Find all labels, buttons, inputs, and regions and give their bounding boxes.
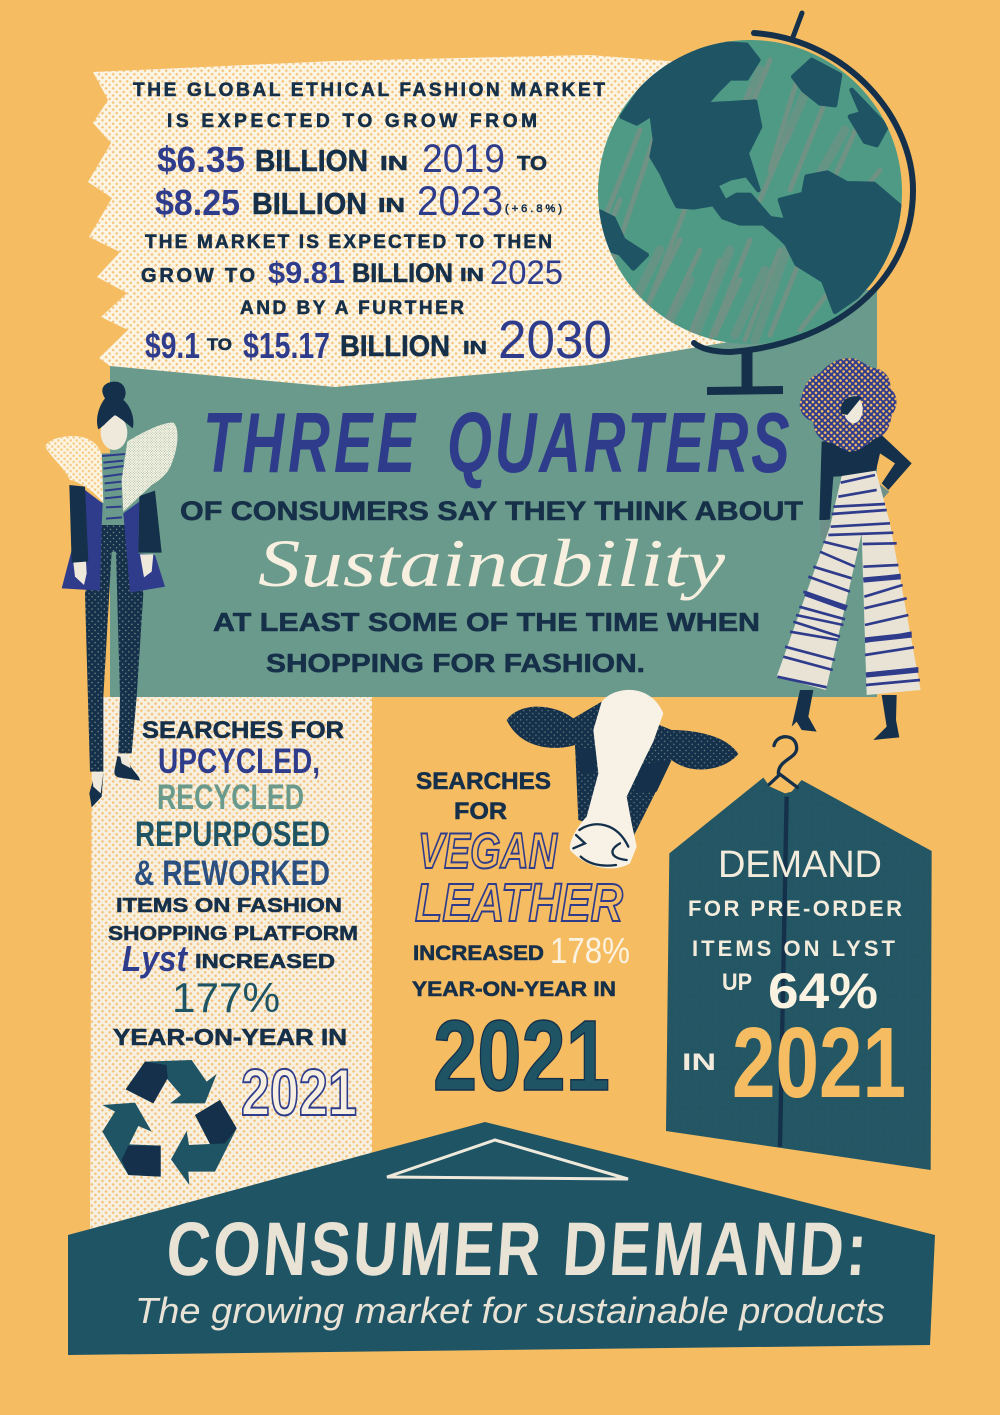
text block: upcycled searches: INCREASED [195,951,335,973]
text block: market statistics: AND BY A FURTHER [240,298,464,319]
text block: pre-order demand: 2021 [732,1007,906,1119]
text block: market statistics: IN [463,338,487,358]
text block: consumers statement: AT LEAST SOME OF THE TIME WHEN [213,607,760,637]
text block: upcycled searches: & REWORKED [134,854,330,893]
text block: market statistics: BILLION [352,258,453,288]
text block: consumers statement [180,496,804,678]
text block: upcycled searches: Lyst [122,938,189,979]
icon: recycling symbol [102,1060,237,1185]
text block: market statistics: $15.17 [243,325,330,366]
text block: market statistics: TO [517,153,547,175]
text block: upcycled searches: REPURPOSED [135,815,330,854]
text block: upcycled searches [108,717,358,1129]
icon: globe stand [694,13,913,391]
text block: market statistics: BILLION [252,186,367,221]
text block: market statistics: IN [380,153,408,175]
panel: torn paper market statistics [88,55,760,387]
text block: pre-order demand: DEMAND [718,844,882,886]
text block: market statistics: IN [378,195,405,217]
text block: market statistics: $9.81 [268,255,345,290]
panel: green sustainability [110,290,877,697]
text block: market statistics: BILLION [340,330,450,363]
text block: market statistics: 2023 [417,177,503,224]
text block: pre-order demand: UP [722,969,752,996]
text block: pre-order demand [682,844,906,1119]
text block: upcycled searches: SEARCHES FOR [142,717,344,744]
icon: globe [598,40,902,344]
icon: garment tag with hanger [666,737,932,1170]
text block: market statistics: BILLION [255,143,368,178]
text block: pre-order demand: 64% [768,963,878,1019]
text block: market statistics: 2025 [490,254,563,292]
text block: vegan leather searches: FOR [454,798,507,825]
text block: vegan leather searches: 2021 [433,1000,610,1112]
text block: upcycled searches: YEAR-ON-YEAR IN [113,1024,347,1050]
text block: vegan leather searches: INCREASED [413,942,544,965]
illustration: cow head [507,690,738,868]
text block: market statistics [133,80,612,370]
text block: market statistics: (+6.8%) [505,203,562,215]
text block: vegan leather searches: YEAR-ON-YEAR IN [412,978,616,1001]
panel: roof banner [68,1122,935,1355]
text block: consumers statement: SHOPPING FOR FASHION. [266,648,645,678]
subtitle: The growing market for sustainable products [135,1290,885,1331]
text block: consumers statement: OF CONSUMERS SAY THEY THINK ABOUT [180,496,804,526]
text block: pre-order demand: IN [682,1049,716,1076]
heading: three quarters: THREE [203,396,417,491]
text block: pre-order demand: FOR PRE-ORDER [688,896,902,921]
text block: market statistics: THE GLOBAL ETHICAL FASHION MARKET [133,80,605,101]
title: CONSUMER DEMAND: [164,1207,870,1292]
text block: upcycled searches: UPCYCLED, [158,742,320,781]
text block: market statistics: 2030 [498,310,612,370]
text block: market statistics: THE MARKET IS EXPECTED TO THEN [145,232,552,253]
text block: vegan leather searches: LEATHER [415,873,623,933]
text block: vegan leather searches: 178% [550,930,630,971]
text block: market statistics: $8.25 [155,182,240,223]
text block: consumers statement: Sustainability [258,525,726,601]
text block: vegan leather searches: VEGAN [418,823,558,879]
text block: market statistics: 2019 [422,137,505,181]
text block: upcycled searches: 2021 [241,1055,357,1129]
text block: market statistics: $9.1 [145,325,200,366]
illustration: woman in striped trousers [777,358,921,740]
text block: market statistics: GROW TO [141,265,255,287]
text block: market statistics: $6.35 [157,139,245,180]
text block: market statistics: IN [460,265,484,285]
text block: upcycled searches: SHOPPING PLATFORM [108,923,358,945]
heading: three quarters [203,396,790,491]
text block: upcycled searches: RECYCLED [157,778,304,817]
text block: upcycled searches: 177% [172,974,280,1021]
illustration: woman in blue jacket [45,382,178,807]
text block: vegan leather searches [412,768,630,1112]
text block: upcycled searches: ITEMS ON FASHION [116,895,342,917]
text block: pre-order demand: ITEMS ON LYST [692,936,896,961]
text block: market statistics: IS EXPECTED TO GROW FROM [167,111,537,132]
panel: upcycled searches [90,697,372,1240]
heading: three quarters: QUARTERS [447,396,790,491]
text block: vegan leather searches: SEARCHES [416,768,551,795]
text block: market statistics: TO [207,335,232,354]
